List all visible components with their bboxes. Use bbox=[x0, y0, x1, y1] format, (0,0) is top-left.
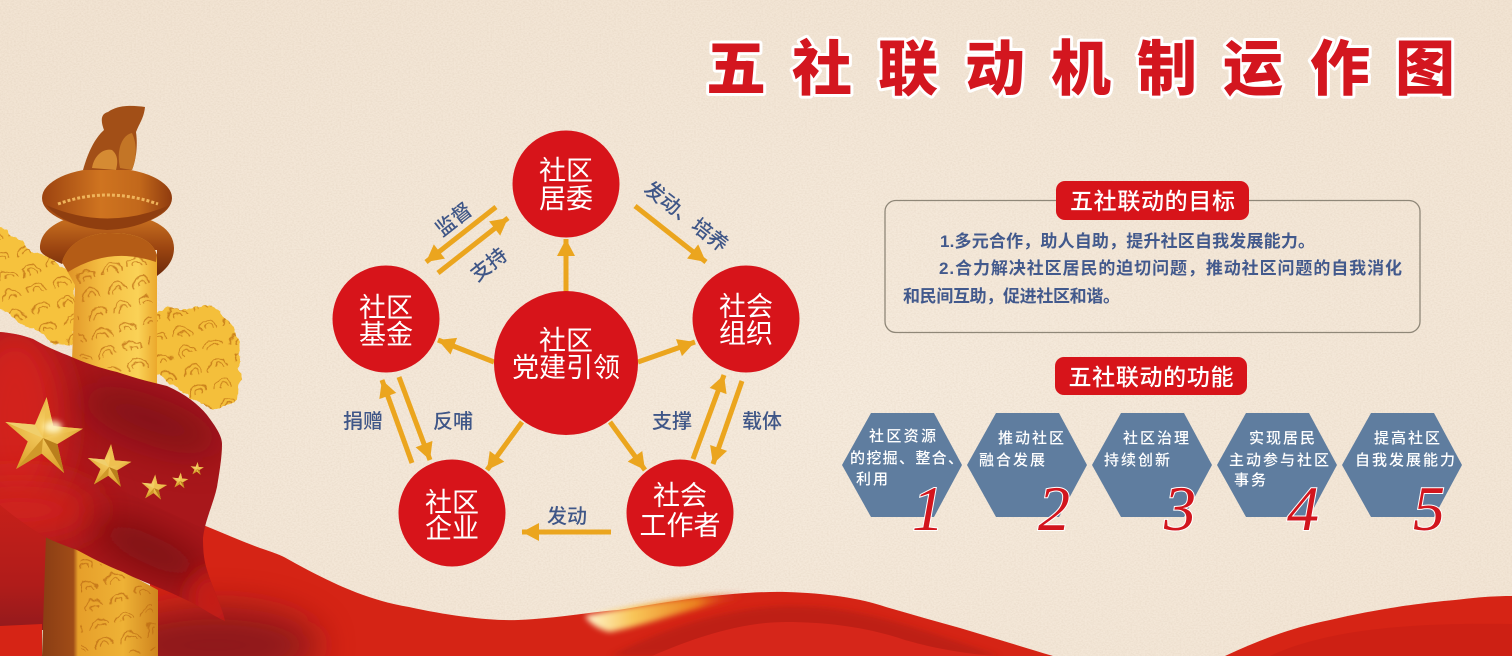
node: residents committee: 居委 bbox=[539, 184, 593, 214]
goal text: 1.多元合作，助人自助，提升社区自我发展能力。 bbox=[940, 231, 1315, 251]
red bottom corner pieces bbox=[0, 624, 42, 656]
node: community enterprise bbox=[398, 460, 506, 566]
function 1: 利用 bbox=[856, 471, 888, 488]
arrow: top to right bbox=[635, 206, 706, 262]
function 1: 的挖掘、整合、 bbox=[850, 449, 963, 467]
function 5: 提高社区 bbox=[1374, 430, 1440, 447]
label: supervise: 监督 bbox=[431, 199, 477, 241]
red flag with stars bbox=[0, 332, 225, 621]
lower-left red backdrop bbox=[0, 480, 46, 630]
function 3: 持续创新 bbox=[1104, 452, 1170, 469]
goal text: 2.合力解决社区居民的迫切问题，推动社区问题的自我消化 bbox=[939, 258, 1402, 278]
upper capital bbox=[42, 168, 172, 230]
goal text: 和民间互助，促进社区和谐。 bbox=[903, 286, 1120, 306]
huabiao column bbox=[0, 106, 240, 408]
bottom red wave bbox=[110, 505, 1512, 656]
node: party leadership bbox=[494, 291, 638, 435]
node: community fund bbox=[332, 266, 440, 372]
arrow: center to top bbox=[564, 239, 568, 292]
heading: functions: 五社联动的功能 bbox=[1068, 364, 1234, 390]
node: social workers: 社会 bbox=[653, 481, 707, 511]
panel: goals bbox=[885, 181, 1420, 332]
arrow: donate bbox=[382, 380, 412, 463]
star glint bbox=[44, 421, 62, 433]
function 5: 自我发展能力 bbox=[1355, 452, 1455, 469]
lion statue bbox=[83, 106, 145, 170]
function 3 bbox=[1092, 413, 1212, 544]
big star bbox=[1, 394, 85, 474]
node: residents committee bbox=[512, 130, 620, 238]
node: social organization: 社会 bbox=[719, 292, 773, 322]
label: uphold: 支撑 bbox=[652, 410, 692, 433]
label: carrier: 载体 bbox=[742, 410, 782, 433]
function 1: 1 bbox=[912, 473, 944, 544]
node: residents committee: 社区 bbox=[539, 156, 593, 186]
function 3: 3 bbox=[1163, 473, 1196, 544]
label: support: 支持 bbox=[466, 244, 512, 286]
heading: goals bbox=[1056, 181, 1249, 220]
function 2: 推动社区 bbox=[998, 430, 1064, 447]
heading: functions bbox=[1055, 357, 1247, 395]
node: community fund: 基金 bbox=[359, 320, 413, 350]
node: community enterprise: 社区 bbox=[425, 488, 479, 518]
left cloud wing bbox=[0, 224, 76, 345]
lower capital ring bbox=[40, 213, 174, 276]
star 5 bbox=[190, 461, 204, 475]
node: social workers bbox=[626, 460, 734, 566]
node: community enterprise: 企业 bbox=[425, 514, 479, 544]
arrow: support bbox=[438, 218, 508, 273]
node: community fund: 社区 bbox=[359, 293, 413, 323]
label: mobilize and cultivate: 发动、培养 bbox=[640, 177, 732, 257]
label: feedback: 反哺 bbox=[433, 410, 473, 433]
node: social organization: 组织 bbox=[719, 319, 773, 349]
star 3 bbox=[140, 473, 168, 500]
node: social workers: 工作者 bbox=[640, 511, 720, 541]
node: party leadership: 社区 bbox=[539, 326, 593, 356]
star 4 bbox=[171, 472, 189, 489]
function 1 bbox=[842, 413, 963, 544]
function 4: 主动参与社区 bbox=[1229, 451, 1329, 469]
arrow: supervise bbox=[426, 207, 496, 262]
column base bbox=[42, 535, 158, 656]
function 2 bbox=[967, 413, 1087, 544]
function 4: 4 bbox=[1287, 473, 1319, 544]
function 1: 社区资源 bbox=[869, 428, 936, 445]
star 2 bbox=[86, 442, 133, 487]
arrow: uphold bbox=[693, 375, 724, 459]
arrow: mobilize bbox=[522, 530, 611, 534]
arrow: carrier bbox=[713, 381, 742, 464]
diagram: five-society linkage bbox=[332, 130, 800, 566]
function 4 bbox=[1217, 413, 1337, 544]
function 3: 社区治理 bbox=[1123, 430, 1189, 447]
arrow: center to bottom-right bbox=[610, 422, 645, 470]
arrow: center to right bbox=[638, 342, 695, 362]
title: 五社联动机制运作图 bbox=[706, 21, 1455, 108]
node: party leadership: 党建引领 bbox=[512, 353, 620, 383]
right cloud wing bbox=[155, 306, 240, 408]
function 5 bbox=[1342, 413, 1462, 544]
function 2: 2 bbox=[1038, 473, 1070, 544]
label: mobilize: 发动 bbox=[547, 505, 587, 528]
goal text bbox=[903, 231, 1402, 306]
arrow: center to bottom-left bbox=[487, 422, 522, 470]
label: donate: 捐赠 bbox=[343, 410, 383, 433]
function 2: 融合发展 bbox=[979, 452, 1045, 469]
node: social organization bbox=[692, 266, 800, 372]
function 4: 实现居民 bbox=[1249, 429, 1315, 447]
heading: goals: 五社联动的目标 bbox=[1070, 188, 1235, 214]
column shaft bbox=[62, 233, 157, 385]
function 4: 事务 bbox=[1234, 472, 1266, 489]
arrow: center to left bbox=[438, 340, 494, 362]
arrow: feedback bbox=[399, 377, 430, 460]
function 5: 5 bbox=[1413, 473, 1445, 544]
